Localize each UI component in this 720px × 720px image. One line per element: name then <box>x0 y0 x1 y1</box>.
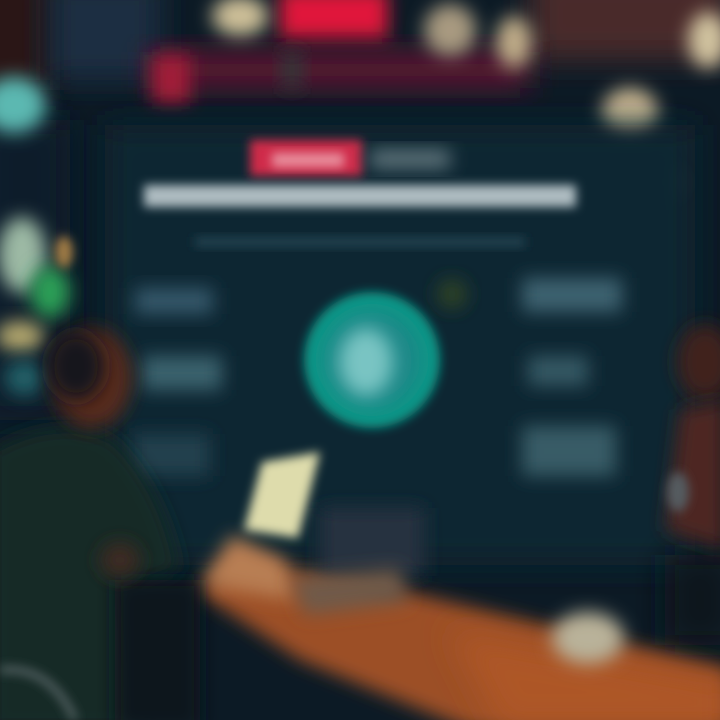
subtitle bar <box>195 237 525 247</box>
small olive dot <box>437 279 467 309</box>
left column text <box>132 288 222 476</box>
display screen panel <box>105 125 695 565</box>
right column text <box>522 278 622 476</box>
central teal circle icon <box>304 292 440 428</box>
dark laptop on table <box>290 508 424 615</box>
left wall display <box>0 77 73 396</box>
white cup on table <box>552 612 624 664</box>
standing person, right <box>665 324 720 645</box>
glowing tablet <box>244 452 320 538</box>
title highlight box <box>250 140 362 176</box>
wooden table <box>195 535 720 720</box>
seated person, left <box>0 328 200 720</box>
hanging lamps <box>212 0 720 198</box>
screen title <box>144 140 576 247</box>
title text bar <box>144 185 576 207</box>
red ceiling banner <box>150 0 530 103</box>
